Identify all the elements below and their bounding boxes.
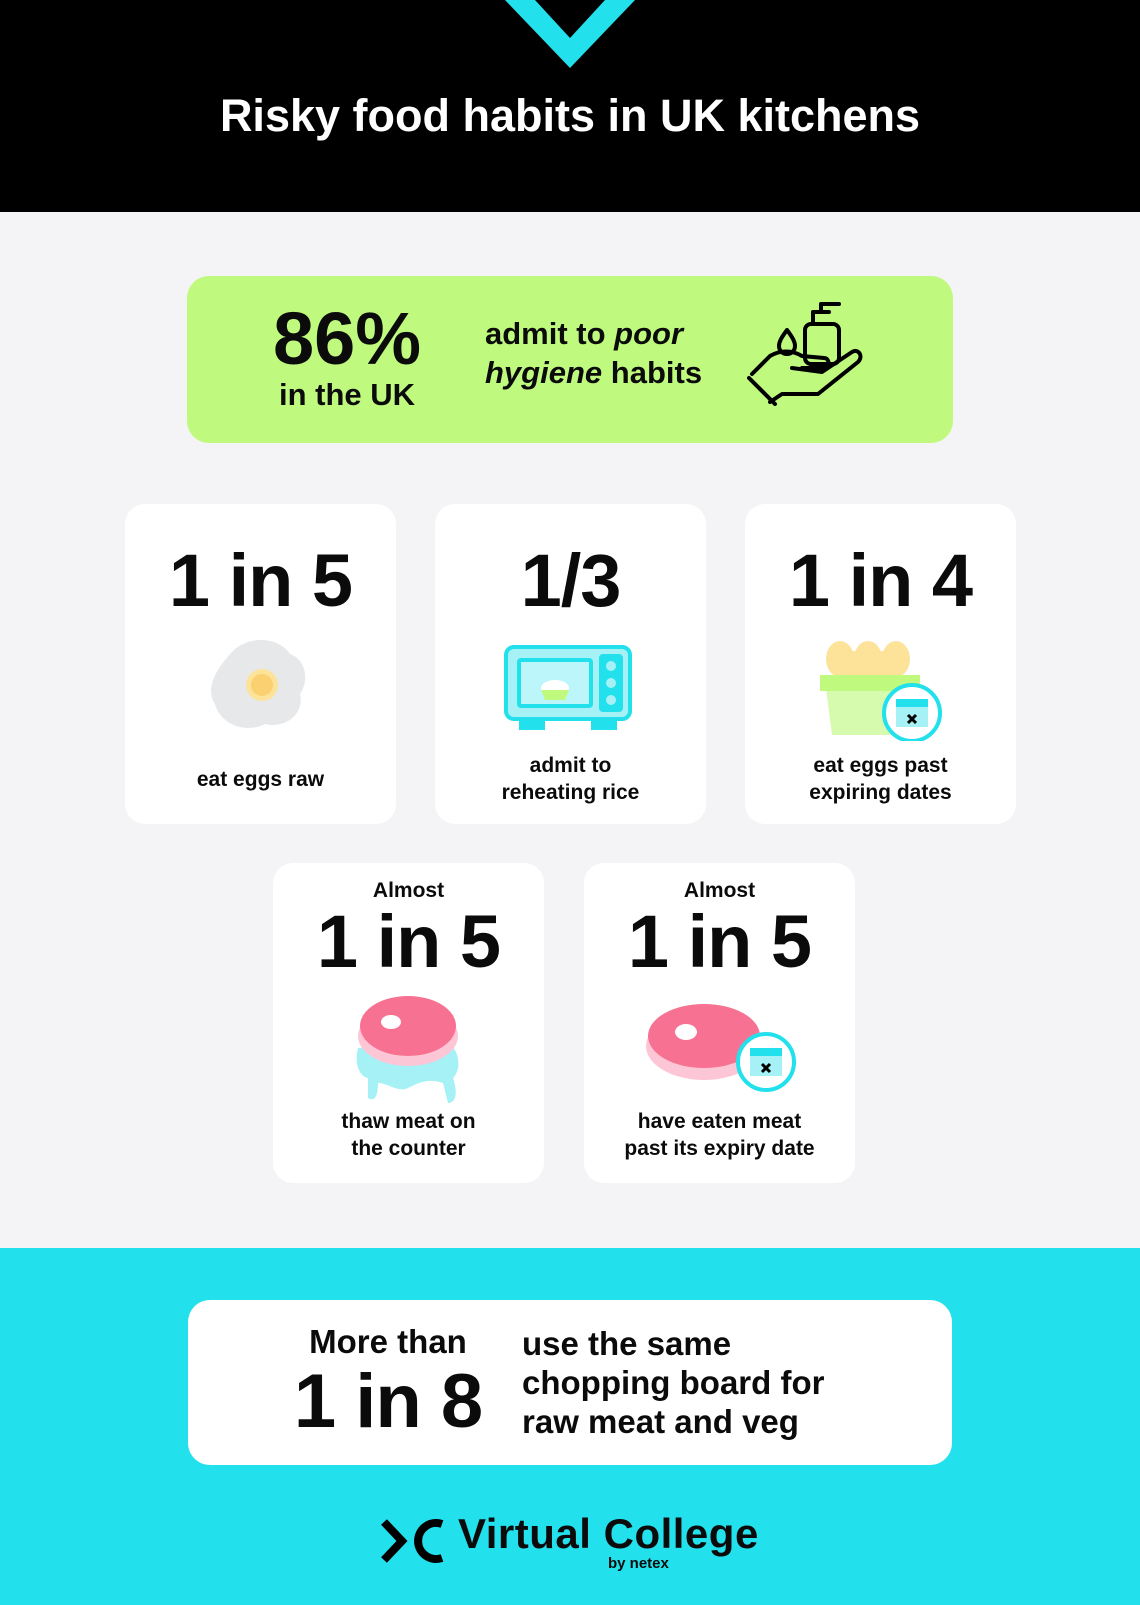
card: thaw meat: thaw meat on [341,1110,476,1133]
icon: thawing meat [356,996,458,1103]
text: chopping board: use the same [522,1325,731,1362]
icon: hand wash [747,302,862,406]
stat: more than 1 in 8: 1 in 8 [294,1359,482,1444]
stat 86%: in the UK [279,377,415,412]
panel: chopping board [188,1300,952,1465]
card: meat past expiry: Almost [684,879,755,902]
card: meat past expiry: past its expiry date [624,1137,815,1160]
card: eggs past expiry: expiring dates [809,781,952,804]
text: poor hygiene: hygiene habits [485,355,702,390]
card: reheating rice: admit to [530,754,611,777]
card: thaw meat: Almost [373,879,444,902]
card: eggs past expiry: eat eggs past [813,754,948,777]
footer band [0,1248,1140,1605]
card: reheating rice: reheating rice [502,781,639,804]
panel: 86% hygiene [187,276,953,443]
logo: by netex [608,1555,669,1572]
text: chopping board [522,1325,824,1440]
icon: fried egg [211,640,306,728]
icon: meat with calendar [646,1004,796,1092]
card: meat past expiry [584,863,855,1183]
card: reheating rice [435,504,706,824]
logo [381,1510,759,1572]
icon: chevron [505,0,635,68]
card: eggs past expiry [745,504,1016,824]
text: chopping board: chopping board for [522,1364,824,1401]
stat 86%: 86% [273,297,421,380]
header [0,0,1140,212]
card: eggs raw: 1 in 5 [169,539,352,622]
card: thaw meat: 1 in 5 [317,900,500,983]
stat: more than 1 in 8: More than [309,1323,467,1360]
card: thaw meat: the counter [351,1137,466,1160]
card: reheating rice: 1/3 [521,539,620,622]
text: chopping board: raw meat and veg [522,1403,799,1440]
text: poor hygiene [485,316,702,390]
card: eggs raw: eat eggs raw [197,768,324,791]
card: meat past expiry: 1 in 5 [628,900,811,983]
card: thaw meat [273,863,544,1183]
text: poor hygiene: admit to poor [485,316,683,351]
card: meat past expiry: have eaten meat [638,1110,801,1133]
logo: Virtual College [458,1510,759,1557]
title: Risky food habits in UK kitchens [220,90,920,141]
icon: microwave [504,645,632,730]
card: eggs past expiry: 1 in 4 [789,539,972,622]
card: eggs raw [125,504,396,824]
icon: egg box with calendar [820,641,942,741]
